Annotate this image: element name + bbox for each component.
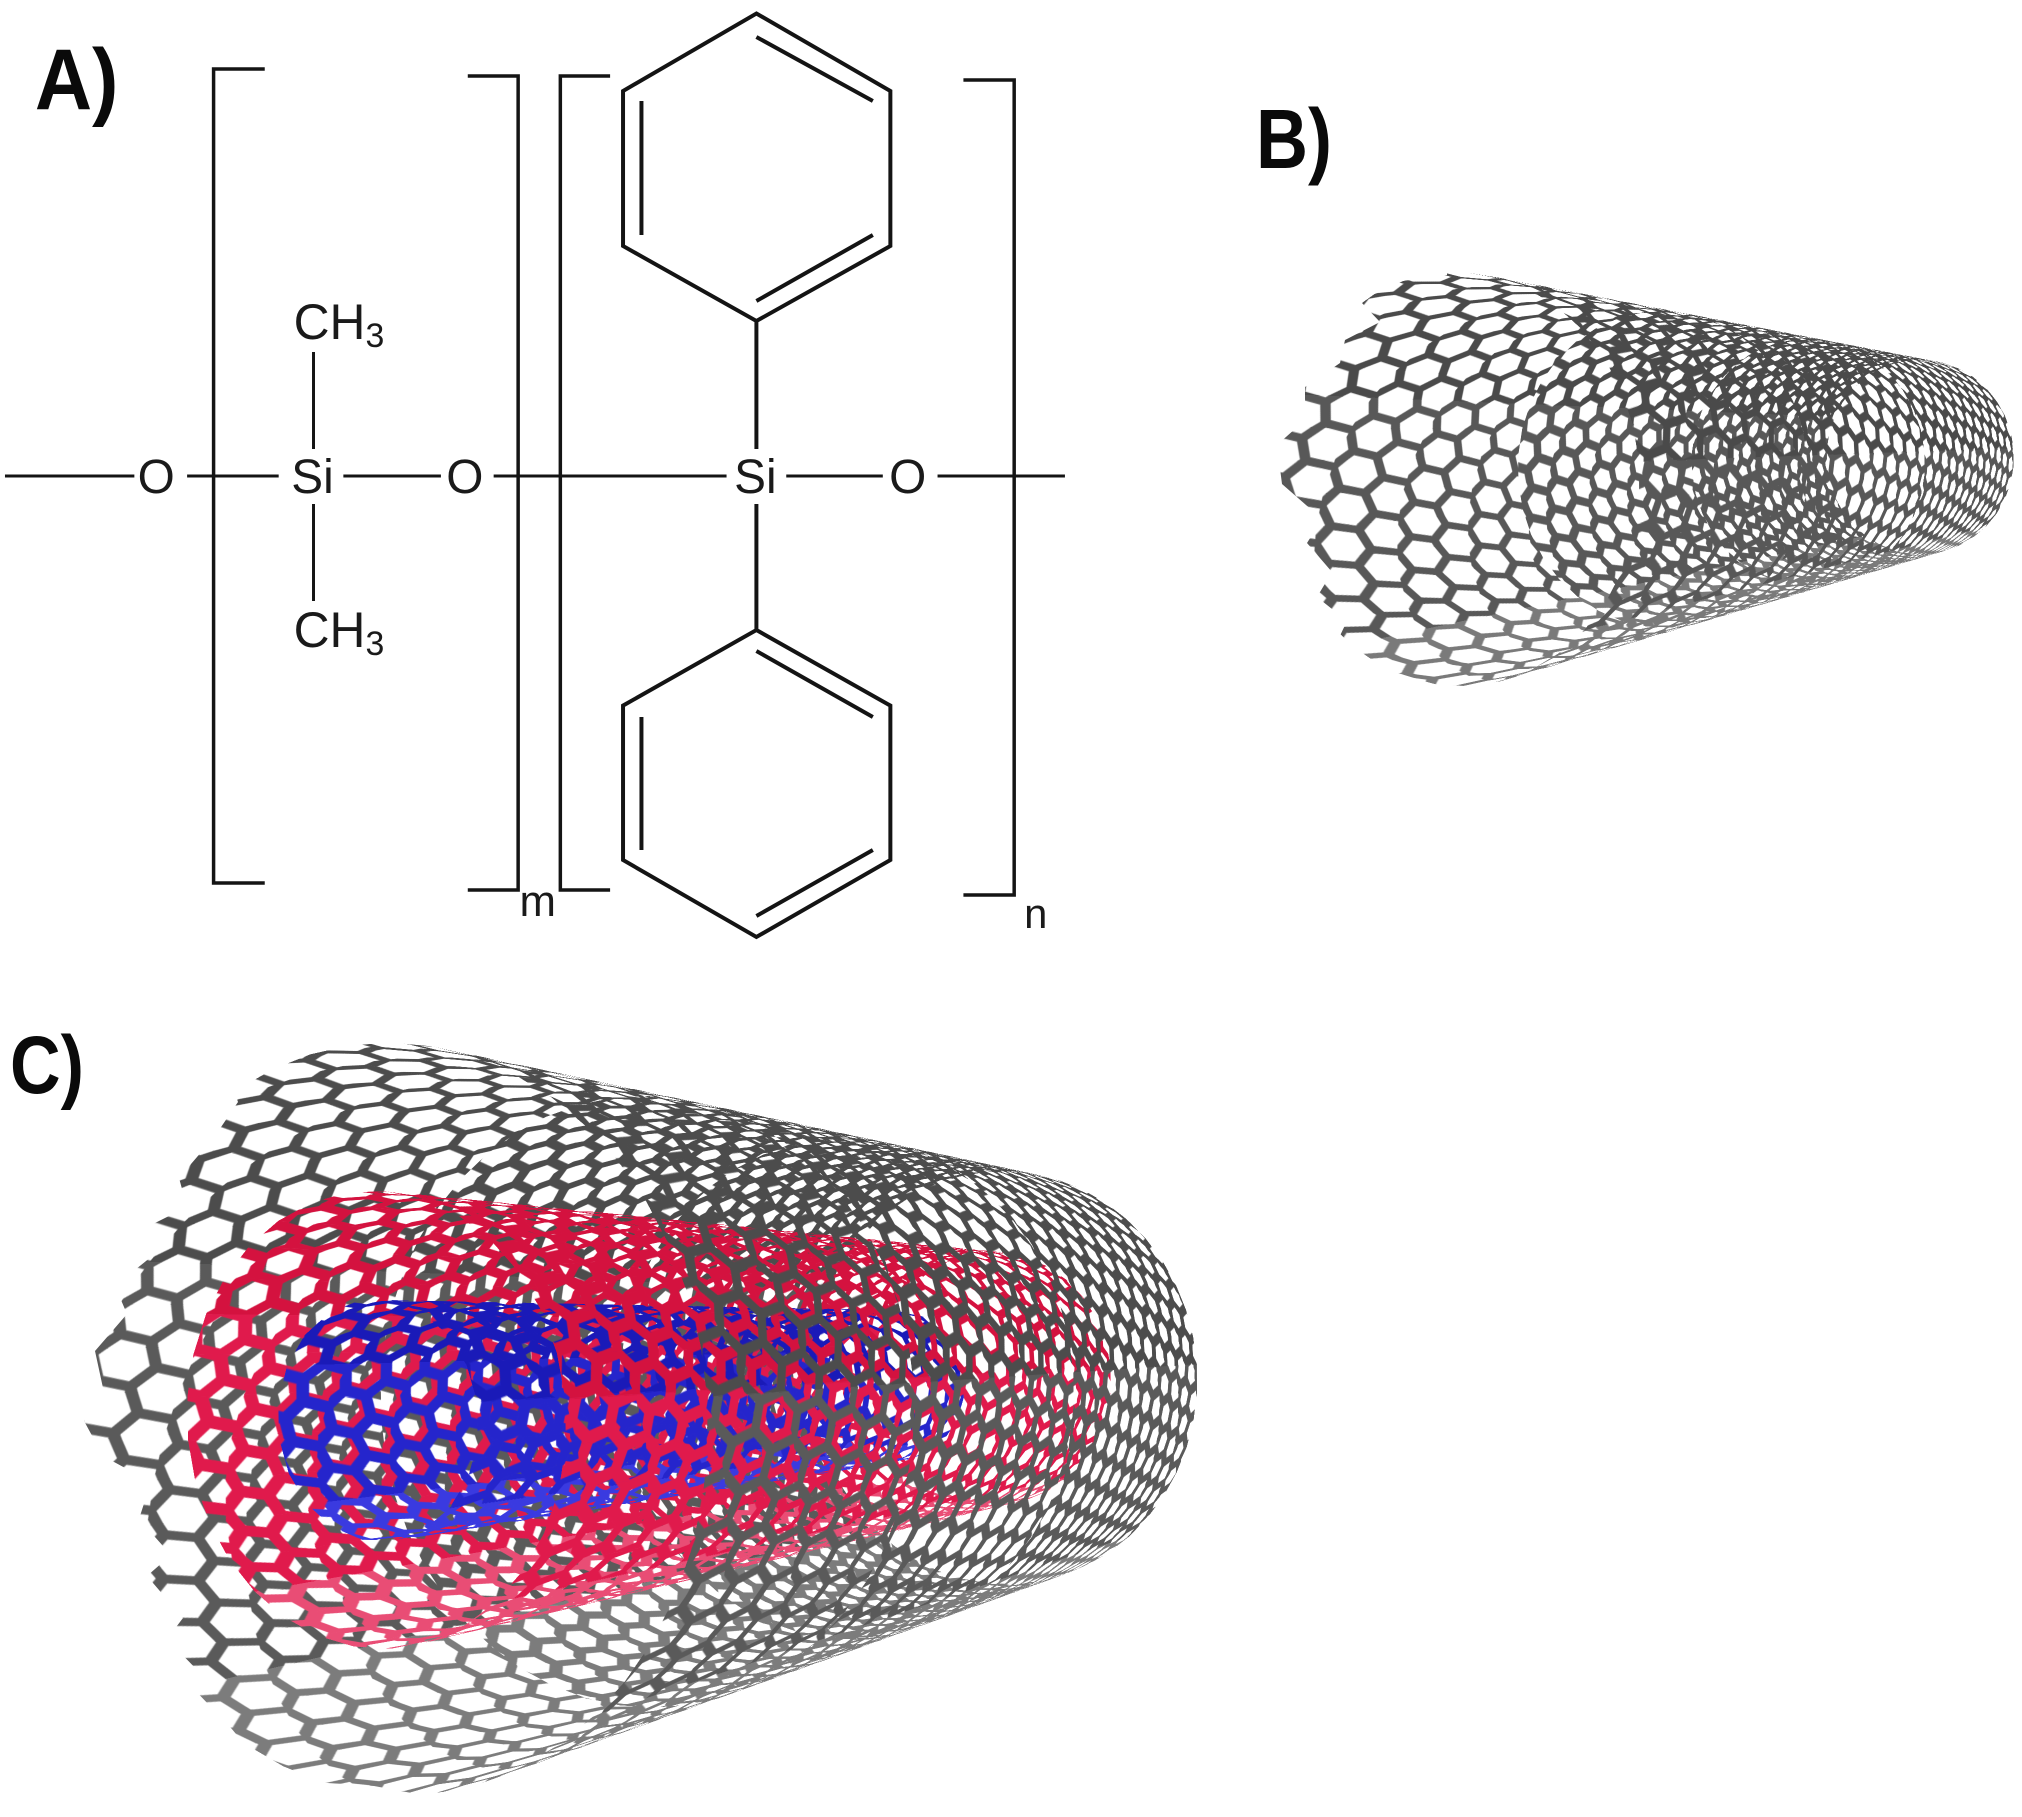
phenyl ring lower with bond to Si: [623, 504, 890, 937]
label A): A): [35, 32, 118, 128]
methyl group lower: 3: [365, 625, 384, 663]
atom labels on backbone: O: [889, 451, 926, 504]
bracket: dimethylsiloxane unit left: [214, 69, 265, 883]
methyl group upper: 3: [365, 317, 384, 355]
label B): B): [1256, 92, 1332, 186]
atom labels on backbone: O: [446, 451, 483, 504]
atom labels on backbone: [138, 451, 926, 504]
methyl group lower: CH: [294, 602, 365, 658]
atom labels on backbone: Si: [291, 451, 334, 504]
bracket: diphenylsiloxane unit left: [560, 76, 610, 890]
atom labels on backbone: O: [138, 451, 175, 504]
inner blue wall: [278, 1300, 964, 1540]
outer grey wall: [84, 1044, 1197, 1793]
bracket: dimethylsiloxane unit right: [468, 76, 518, 890]
middle red wall: [188, 1191, 1111, 1648]
bracket: diphenylsiloxane unit right: [963, 80, 1014, 895]
panel C: triple-wall nanotube: [84, 1044, 1197, 1793]
panel B: single-wall nanotube: [1280, 273, 2014, 686]
subscript n: n: [1024, 890, 1047, 937]
phenyl ring upper with bond to Si: [623, 14, 890, 449]
label C): C): [10, 1020, 84, 1111]
methyl group upper: CH: [294, 294, 365, 350]
subscript m: m: [520, 877, 556, 926]
backbone bonds: [5, 352, 1065, 601]
panel A: polymer structural formula: [4, 11, 1065, 940]
atom labels on backbone: Si: [734, 451, 777, 504]
